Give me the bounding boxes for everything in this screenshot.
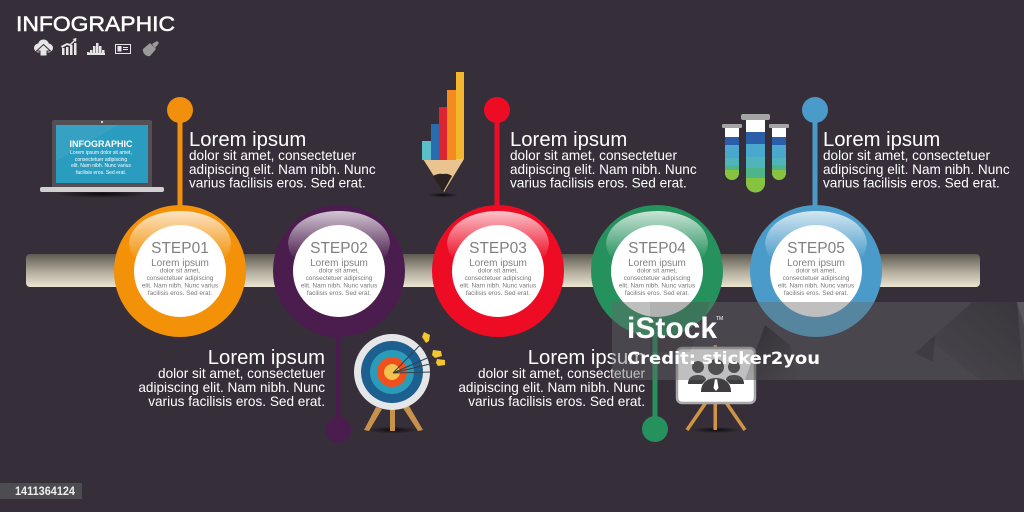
icon: laptop: Lorem ipsum dolor sit amet,: [70, 150, 132, 156]
step 2 circle: dolor sit amet,: [319, 268, 359, 274]
step 2 circle: [273, 205, 405, 337]
text block: step 3: varius facilisis eros. Sed erat.: [510, 176, 687, 190]
step 1 circle: STEP01: [151, 240, 209, 257]
step 1 circle: facilisis eros. Sed erat.: [148, 290, 212, 297]
step 3 circle: dolor sit amet,: [478, 268, 518, 274]
step 4 circle: dolor sit amet,: [637, 268, 677, 274]
step 3 circle: [432, 205, 564, 337]
step 4 circle: elit. Nam nibh. Nunc varius: [619, 282, 695, 290]
trademark mark: TM: [716, 316, 723, 322]
text block: step 5: adipiscing elit. Nam nibh. Nunc: [823, 162, 1010, 177]
icon: laptop: elit. Nam nibh. Nunc varius: [71, 163, 131, 169]
icon: satellite dish: [143, 41, 159, 56]
step 3 circle: consectetuer adipiscing: [465, 275, 532, 282]
step 3 circle: facilisis eros. Sed erat.: [466, 290, 530, 297]
watermark band: [612, 302, 1024, 380]
step 1 circle: Lorem ipsum: [151, 258, 209, 269]
text block: step 5: dolor sit amet, consectetuer: [823, 148, 990, 163]
text block: step 2: Lorem ipsum: [208, 347, 325, 369]
text block: step 4: Lorem ipsum: [528, 347, 645, 369]
step 4 circle: [591, 205, 723, 337]
icon: id card: [115, 44, 131, 54]
text block: step 5: Lorem ipsum: [823, 129, 940, 151]
timeline bar: [26, 254, 980, 287]
step 2 circle: facilisis eros. Sed erat.: [307, 290, 371, 297]
icon: laptop: consectetuer adipiscing: [75, 157, 127, 163]
step 2 circle: Lorem ipsum: [310, 258, 368, 269]
step 1 connector and pin: [167, 97, 193, 210]
text block: step 1: dolor sit amet, consectetuer: [189, 148, 356, 163]
step 5 circle: facilisis eros. Sed erat.: [784, 290, 848, 297]
text block: step 2: dolor sit amet, consectetuer: [158, 366, 325, 381]
icon: presentation board with people: [677, 345, 755, 433]
text block: step 4: dolor sit amet, consectetuer: [478, 366, 645, 381]
text block: step 1: adipiscing elit. Nam nibh. Nunc: [189, 162, 376, 177]
step 2 connector and pin: [325, 330, 351, 443]
text block: step 3: [510, 129, 697, 190]
step 1 circle: consectetuer adipiscing: [147, 275, 214, 282]
text block: step 3: adipiscing elit. Nam nibh. Nunc: [510, 162, 697, 177]
text block: step 1: [189, 129, 376, 190]
top icon row: [34, 38, 159, 56]
step 4 connector and pin: [642, 330, 668, 442]
step 5 circle: elit. Nam nibh. Nunc varius: [778, 282, 854, 290]
step 2 circle: consectetuer adipiscing: [306, 275, 373, 282]
icon: laptop: facilisis eros. Sed erat.: [76, 170, 126, 176]
icon: laptop: INFOGRAPHIC: [70, 139, 133, 149]
text block: step 4: [458, 347, 645, 409]
icon: growth chart: [61, 38, 76, 55]
step 3 connector and pin: [484, 97, 510, 210]
step 5 connector and pin: [802, 97, 828, 210]
text block: step 3: dolor sit amet, consectetuer: [510, 148, 677, 163]
step 5 circle: STEP05: [787, 240, 845, 257]
icon: pencil bar chart: [422, 72, 464, 198]
icon: bar histogram: [87, 43, 105, 55]
step 3 circle: STEP03: [469, 240, 527, 257]
image id tag: 1411364124: [15, 486, 76, 498]
text block: step 2: [138, 347, 325, 409]
watermark logo: iStock: [627, 312, 717, 345]
text block: step 4: varius facilisis eros. Sed erat.: [468, 394, 645, 409]
step 3 circle: Lorem ipsum: [469, 258, 527, 269]
icon: test tubes: [722, 114, 789, 193]
icon: cloud upload: [34, 40, 53, 56]
step 2 circle: STEP02: [310, 240, 368, 257]
step 5 circle: Lorem ipsum: [787, 258, 845, 269]
step 5 circle: consectetuer adipiscing: [783, 275, 850, 282]
text block: step 4: adipiscing elit. Nam nibh. Nunc: [458, 380, 645, 395]
text block: step 5: [823, 129, 1010, 190]
text block: step 2: varius facilisis eros. Sed erat.: [148, 394, 325, 409]
step 4 circle: facilisis eros. Sed erat.: [625, 290, 689, 297]
watermark credit: Credit: sticker2you: [627, 349, 820, 369]
text block: step 1: Lorem ipsum: [189, 129, 306, 151]
step 5 circle: [750, 205, 882, 337]
step 3 circle: elit. Nam nibh. Nunc varius: [460, 282, 536, 290]
step 4 circle: consectetuer adipiscing: [624, 275, 691, 282]
step 4 circle: Lorem ipsum: [628, 258, 686, 269]
step 4 circle: STEP04: [628, 240, 686, 257]
text block: step 1: varius facilisis eros. Sed erat.: [189, 176, 366, 190]
text block: step 3: Lorem ipsum: [510, 129, 627, 151]
icon: laptop: [40, 120, 164, 198]
step 5 circle: dolor sit amet,: [796, 268, 836, 274]
step 2 circle: elit. Nam nibh. Nunc varius: [301, 282, 377, 290]
text block: step 2: adipiscing elit. Nam nibh. Nunc: [138, 380, 325, 395]
icon: archery target: [354, 332, 445, 434]
text block: step 5: varius facilisis eros. Sed erat.: [823, 176, 1000, 190]
title: INFOGRAPHIC: [16, 13, 175, 36]
step 1 circle: [114, 205, 246, 337]
image id tag: [0, 483, 82, 499]
step 1 circle: elit. Nam nibh. Nunc varius: [142, 282, 218, 290]
step 1 circle: dolor sit amet,: [160, 268, 200, 274]
